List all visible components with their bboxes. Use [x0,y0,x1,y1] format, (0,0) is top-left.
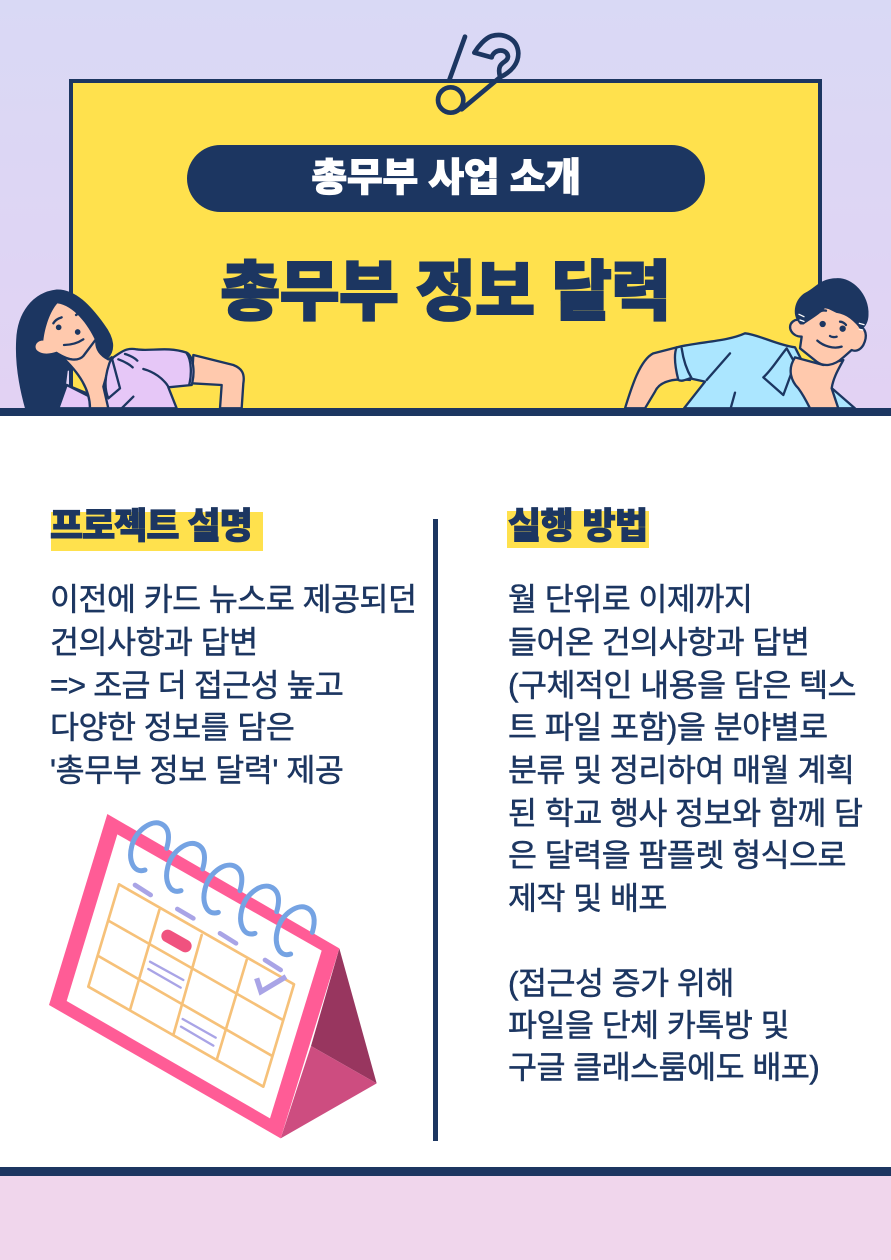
yellow title board [69,79,822,415]
main title: 총무부 정보 달력 [220,255,671,328]
illustration: desk calendar [49,814,377,1138]
right body text: 트 파일 포함)을 분야별로 [508,709,828,745]
section heading: project description [50,505,263,551]
centre divider [433,519,438,1141]
right body text: (접근성 증가 위해 [508,965,734,1001]
right body text: 월 단위로 이제까지 [508,581,752,617]
left body text: 건의사항과 답변 [50,624,258,660]
heading highlight [507,511,649,548]
top divider band [0,408,891,416]
right body text: 분류 및 정리하여 매월 계획 [508,752,854,788]
heading text: 실행 방법 [508,505,647,546]
icon: safety pin with question mark [436,32,521,115]
heading text: 프로젝트 설명 [50,505,252,546]
left body text: 다양한 정보를 담은 [50,709,294,745]
right body text: 구글 클래스룸에도 배포) [508,1049,819,1085]
section heading: execution method [507,505,649,548]
illustration: man leaning [624,278,868,408]
left body text: 이전에 카드 뉴스로 제공되던 [50,581,417,617]
right body text: 된 학교 행사 정보와 함께 담 [508,795,863,831]
header background [0,0,891,410]
illustration: woman leaning [16,290,245,408]
heading highlight [51,512,263,551]
right body text: 은 달력을 팜플렛 형식으로 [508,837,846,873]
right body text [508,581,863,1085]
bottom divider band [0,1167,891,1176]
right body text: 제작 및 배포 [508,880,667,916]
heading pill [187,145,705,212]
right body text: 들어온 건의사항과 답변 [508,624,809,660]
right body text: 파일을 단체 카톡방 및 [508,1007,789,1043]
left body text: => 조금 더 접근성 높고 [50,667,343,703]
pill label: 총무부 사업 소개 [311,157,581,200]
footer band [0,1176,891,1260]
left body text: '총무부 정보 달력' 제공 [50,752,344,788]
right body text: (구체적인 내용을 담은 텍스 [508,667,856,703]
left body text [50,581,417,788]
